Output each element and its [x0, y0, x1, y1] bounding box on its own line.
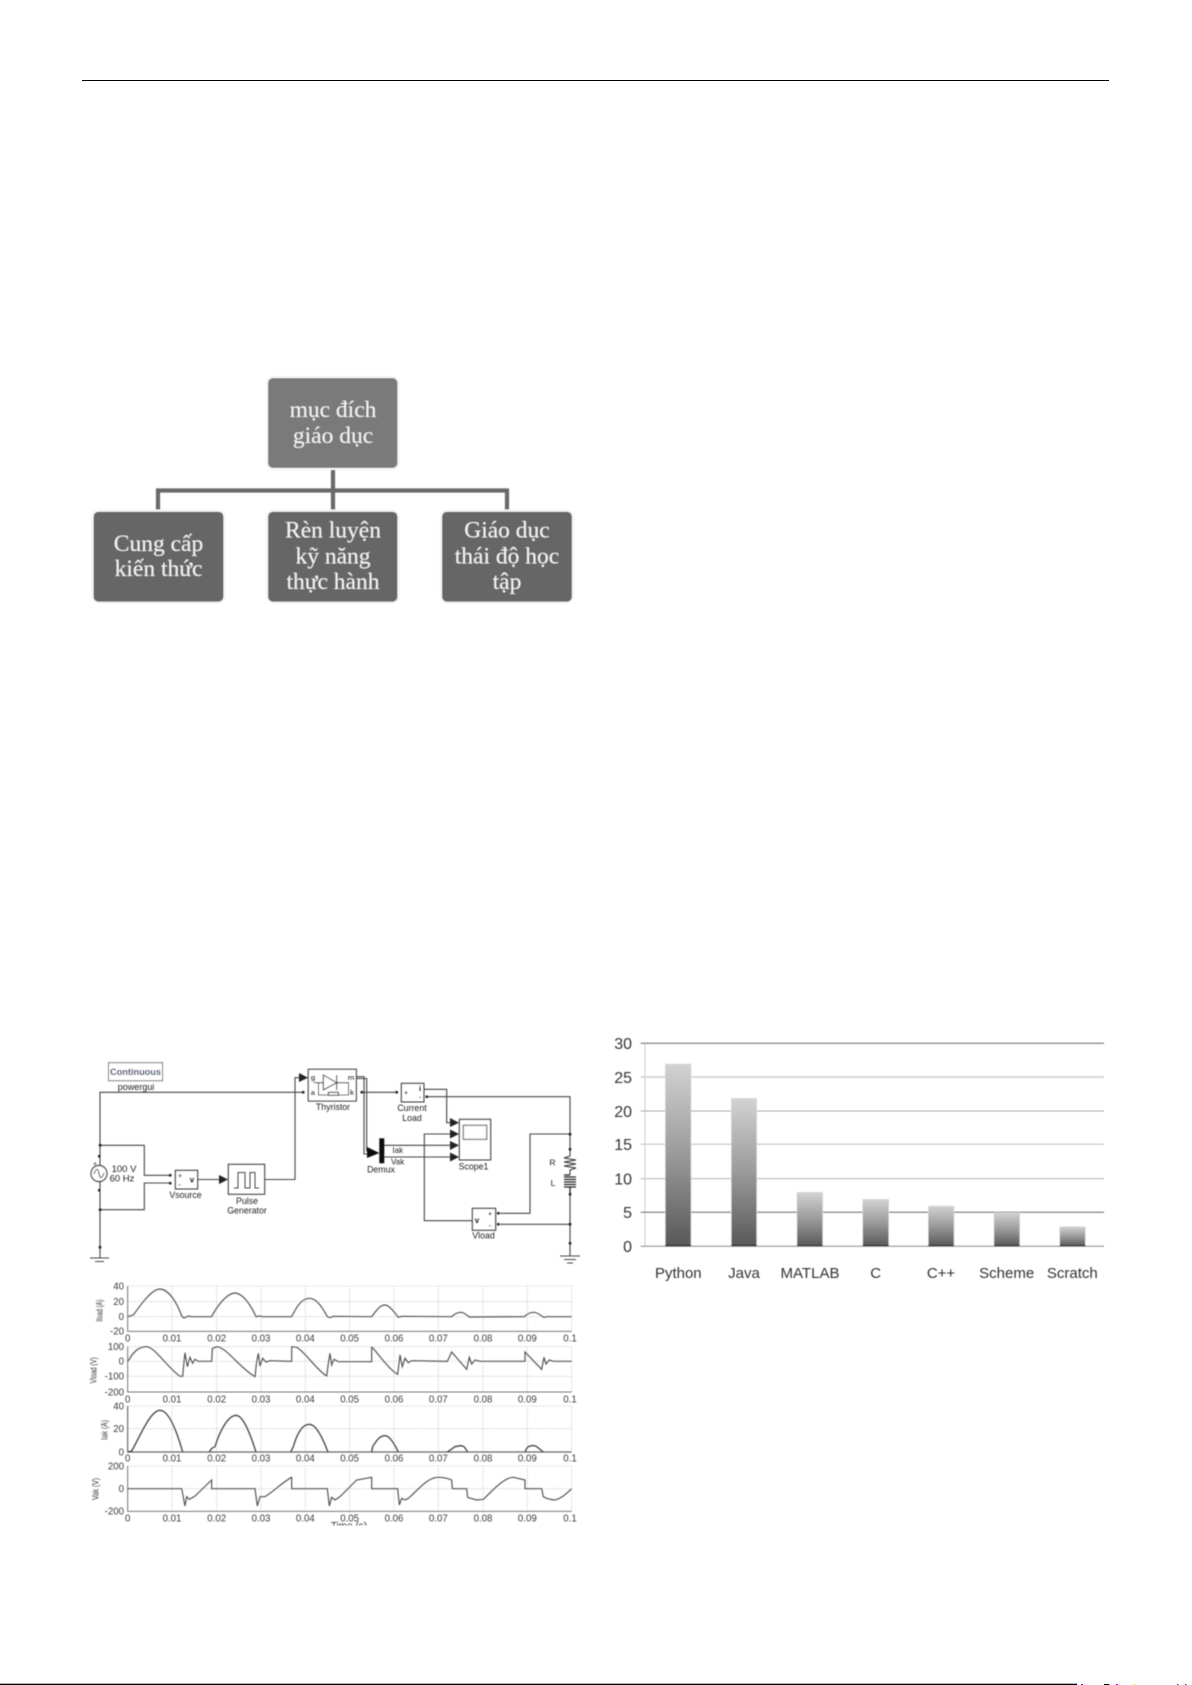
plot: Iload (A): 0.05 — [340, 1334, 359, 1345]
y axis labels — [614, 1036, 632, 1256]
plot: Iload (A): 0.03 — [252, 1334, 270, 1345]
y axis labels: 25 — [614, 1070, 632, 1087]
y axis labels: 20 — [614, 1104, 632, 1121]
bar: C 7 — [863, 1199, 889, 1282]
bar: Java 22: Java — [728, 1265, 760, 1282]
voltage measurement: Vsource — [169, 1170, 202, 1200]
AC voltage source — [91, 1155, 137, 1192]
voltage measurement: Vload — [472, 1208, 500, 1240]
bar: Scratch 3: Scratch — [1047, 1265, 1098, 1282]
plot: Iload (A): 0.02 — [207, 1334, 226, 1345]
current measurement: Current Load: - — [419, 1094, 422, 1102]
voltage measurement: Vsource: + — [178, 1173, 182, 1180]
voltage measurement: Vsource: Vsource — [169, 1190, 202, 1200]
circuit schematic: thyristor simulation — [90, 1063, 580, 1263]
plot: Iload (A): -20 — [110, 1327, 124, 1338]
pulse generator block — [219, 1164, 267, 1216]
plot: Vak (V): 0.04 — [296, 1514, 315, 1525]
scope block: Scope1 — [459, 1162, 489, 1172]
plot: Vload (V): 0 — [119, 1357, 124, 1368]
y axis labels: 10 — [614, 1172, 632, 1188]
y axis labels: 15 — [614, 1137, 632, 1154]
thyristor block: g — [311, 1073, 316, 1082]
plot: Vload (V): 0.06 — [385, 1394, 403, 1405]
voltage measurement: Vload: + — [488, 1211, 492, 1218]
pulse generator block: Pulse — [236, 1196, 258, 1206]
RL load with ground: L — [551, 1178, 556, 1188]
plot: Iak (A): 0.06 — [385, 1454, 403, 1465]
plot: Vload (V): Vload (V) — [89, 1357, 99, 1383]
voltage measurement: Vsource: - — [178, 1182, 181, 1189]
plot: Vak (V): 200 — [108, 1461, 124, 1472]
bar: MATLAB 8 — [781, 1192, 839, 1282]
plot: Iload (A): 0.08 — [474, 1334, 492, 1345]
RL load with ground — [549, 1133, 580, 1263]
AC voltage source: 60 Hz — [110, 1174, 135, 1184]
bar: Java 22 — [728, 1098, 760, 1282]
demux block: Demux — [367, 1164, 396, 1174]
box: Giáo dục thái độ học tập — [440, 510, 574, 603]
voltage measurement: Vload: - — [489, 1223, 492, 1230]
plot: Vload (V): 0.02 — [207, 1394, 226, 1405]
box: Rèn luyện kỹ năng thực hành: kỹ năng — [295, 544, 371, 570]
plot: Vload (V): 0.09 — [518, 1394, 537, 1405]
plot: Vak (V): Vak (V) — [90, 1478, 100, 1500]
RL load with ground: R — [549, 1158, 556, 1168]
bar: MATLAB 8: MATLAB — [781, 1265, 839, 1282]
plot: Iak (A) — [99, 1401, 577, 1465]
plot: Vload (V): 0.04 — [296, 1394, 315, 1405]
bar: Python 27: Python — [655, 1265, 702, 1282]
plot: Iload (A) — [95, 1281, 577, 1345]
plot: Iak (A): 0.07 — [429, 1454, 448, 1465]
flowchart: mục đích giáo dục — [92, 376, 574, 603]
plot: Vak (V): 0.09 — [518, 1514, 537, 1525]
plot: Vload (V): 0.03 — [252, 1394, 270, 1405]
plot: Vload (V): 0 — [125, 1394, 130, 1405]
solver block: Continuous powergui: Continuous — [110, 1067, 161, 1077]
plot: Iload (A): 0 — [125, 1334, 130, 1345]
plot: Iak (A): 0.1 — [563, 1454, 577, 1465]
current measurement: Current Load: Load — [402, 1113, 422, 1123]
root box: mục đích giáo dục — [266, 376, 399, 470]
box: Giáo dục thái độ học tập: tập — [493, 569, 521, 595]
demux block: Vak — [391, 1158, 405, 1166]
solver block: Continuous powergui: powergui — [118, 1082, 154, 1092]
demux block — [367, 1138, 405, 1174]
plot: Vload (V): -100 — [105, 1372, 124, 1383]
bar: C++ 6 — [927, 1206, 955, 1282]
thyristor block: Thyristor — [316, 1102, 350, 1112]
plot: Vload (V): 0.01 — [163, 1394, 181, 1405]
current measurement: Current Load: i — [419, 1084, 421, 1093]
plot: Iload (A): 0.1 — [563, 1334, 577, 1345]
plot: Iload (A): 0.01 — [163, 1334, 181, 1345]
box: Cung cấp kiến thức: Cung cấp — [114, 531, 203, 557]
demux block: Iak — [392, 1146, 404, 1155]
bar: C 7: C — [870, 1265, 881, 1282]
plot: Iak (A): 0.03 — [252, 1454, 270, 1465]
plot: Vak (V): 0.02 — [207, 1514, 226, 1525]
plot: Vload (V): 0.05 — [340, 1394, 359, 1405]
plot: Iak (A): 0.04 — [296, 1454, 315, 1465]
bar: Scheme 5 — [979, 1213, 1034, 1282]
bar: C++ 6: C++ — [927, 1265, 955, 1282]
root box: mục đích giáo dục: giáo dục — [293, 423, 373, 449]
plot: Vload (V) — [89, 1342, 577, 1405]
thyristor block — [299, 1069, 363, 1112]
plot: Iak (A): 0.02 — [207, 1454, 226, 1465]
plot: Iload (A): 0.04 — [296, 1334, 315, 1345]
plot: Vload (V): 0.08 — [474, 1394, 492, 1405]
plot: Vload (V): -200 — [105, 1387, 124, 1398]
wires — [100, 1077, 570, 1258]
plot: Vak (V) — [90, 1461, 577, 1525]
plot: Iload (A): 0.06 — [385, 1334, 403, 1345]
bar: Scratch 3 — [1047, 1227, 1098, 1282]
plot: Vload (V): 0.1 — [563, 1394, 577, 1405]
plot: Iak (A): 0.05 — [340, 1454, 359, 1465]
plot: Vak (V): 0.08 — [474, 1514, 492, 1525]
AC voltage source: 100 V — [112, 1164, 137, 1175]
voltage measurement: Vload: v — [475, 1216, 480, 1225]
box: Rèn luyện kỹ năng thực hành: Rèn luyện — [285, 518, 381, 544]
y axis labels: 0 — [623, 1239, 632, 1256]
box: Giáo dục thái độ học tập: Giáo dục — [464, 518, 550, 544]
thyristor block: m — [348, 1073, 355, 1082]
bar: Python 27 — [655, 1064, 702, 1282]
cropped axis title: Time (s): Time (s) — [331, 1521, 367, 1532]
plot: Iak (A): 0.08 — [474, 1454, 492, 1465]
thyristor block: a — [311, 1088, 316, 1097]
plot: Iak (A): 0.01 — [163, 1454, 181, 1465]
current measurement: Current Load: Current — [397, 1103, 427, 1113]
plot: Vak (V): 0.05 — [340, 1514, 359, 1525]
solver block: Continuous powergui — [108, 1063, 162, 1092]
plot: Iak (A): 20 — [113, 1424, 124, 1435]
plot: Iload (A): 20 — [113, 1297, 124, 1308]
plot: Iak (A): 40 — [113, 1401, 124, 1412]
chart gridlines — [641, 1043, 1104, 1246]
plot: Vak (V): 0.03 — [252, 1514, 270, 1525]
plot: Iak (A): Iak (A) — [99, 1420, 109, 1440]
waveform plots: Iload, Vload, Iak, Vak versus time — [89, 1281, 577, 1532]
plot: Vak (V): 0.07 — [429, 1514, 448, 1525]
plot: Iload (A): 0.07 — [429, 1334, 448, 1345]
plot: Iak (A): 0.09 — [518, 1454, 537, 1465]
box: Cung cấp kiến thức: kiến thức — [115, 556, 202, 582]
scope block — [450, 1118, 491, 1172]
plot: Vak (V): 0.06 — [385, 1514, 403, 1525]
header rule — [82, 80, 1109, 81]
current measurement: Current Load — [396, 1083, 428, 1123]
left ground — [90, 1144, 109, 1262]
bar chart: programming languages — [614, 1036, 1104, 1282]
box: Cung cấp kiến thức — [92, 510, 225, 603]
root box: mục đích giáo dục: mục đích — [290, 397, 377, 423]
plot: Vak (V): -200 — [105, 1507, 124, 1518]
connector lines — [158, 468, 507, 511]
y axis labels: 5 — [623, 1205, 632, 1222]
AC voltage source: + — [93, 1161, 97, 1168]
thyristor block: k — [350, 1088, 355, 1097]
voltage measurement: Vsource: v — [190, 1176, 195, 1184]
plot: Iak (A): 0 — [119, 1447, 124, 1458]
plot: Iload (A): Iload (A) — [95, 1300, 105, 1322]
pulse generator block: Generator — [227, 1206, 267, 1216]
plot: Iak (A): 0 — [125, 1454, 130, 1465]
plot: Vak (V): 0.01 — [163, 1514, 181, 1525]
footer rule with clipped marks — [0, 1684, 1186, 1685]
plot: Vload (V): 100 — [108, 1342, 124, 1353]
plot: Iload (A): 0.09 — [518, 1334, 537, 1345]
plot: Vak (V): 0 — [119, 1484, 124, 1495]
plot: Iload (A): 0 — [119, 1312, 124, 1323]
voltage measurement: Vload: Vload — [472, 1230, 495, 1240]
plot: Iload (A): 40 — [113, 1281, 124, 1292]
box: Rèn luyện kỹ năng thực hành: thực hành — [286, 569, 380, 595]
box: Rèn luyện kỹ năng thực hành — [266, 510, 399, 603]
bar: Scheme 5: Scheme — [979, 1265, 1034, 1282]
y axis labels: 30 — [614, 1036, 632, 1053]
box: Giáo dục thái độ học tập: thái độ học — [455, 544, 559, 570]
plot: Vload (V): 0.07 — [429, 1394, 448, 1405]
current measurement: Current Load: + — [404, 1090, 408, 1097]
plot: Vak (V): 0.1 — [563, 1514, 577, 1525]
plot: Vak (V): 0 — [125, 1514, 130, 1525]
